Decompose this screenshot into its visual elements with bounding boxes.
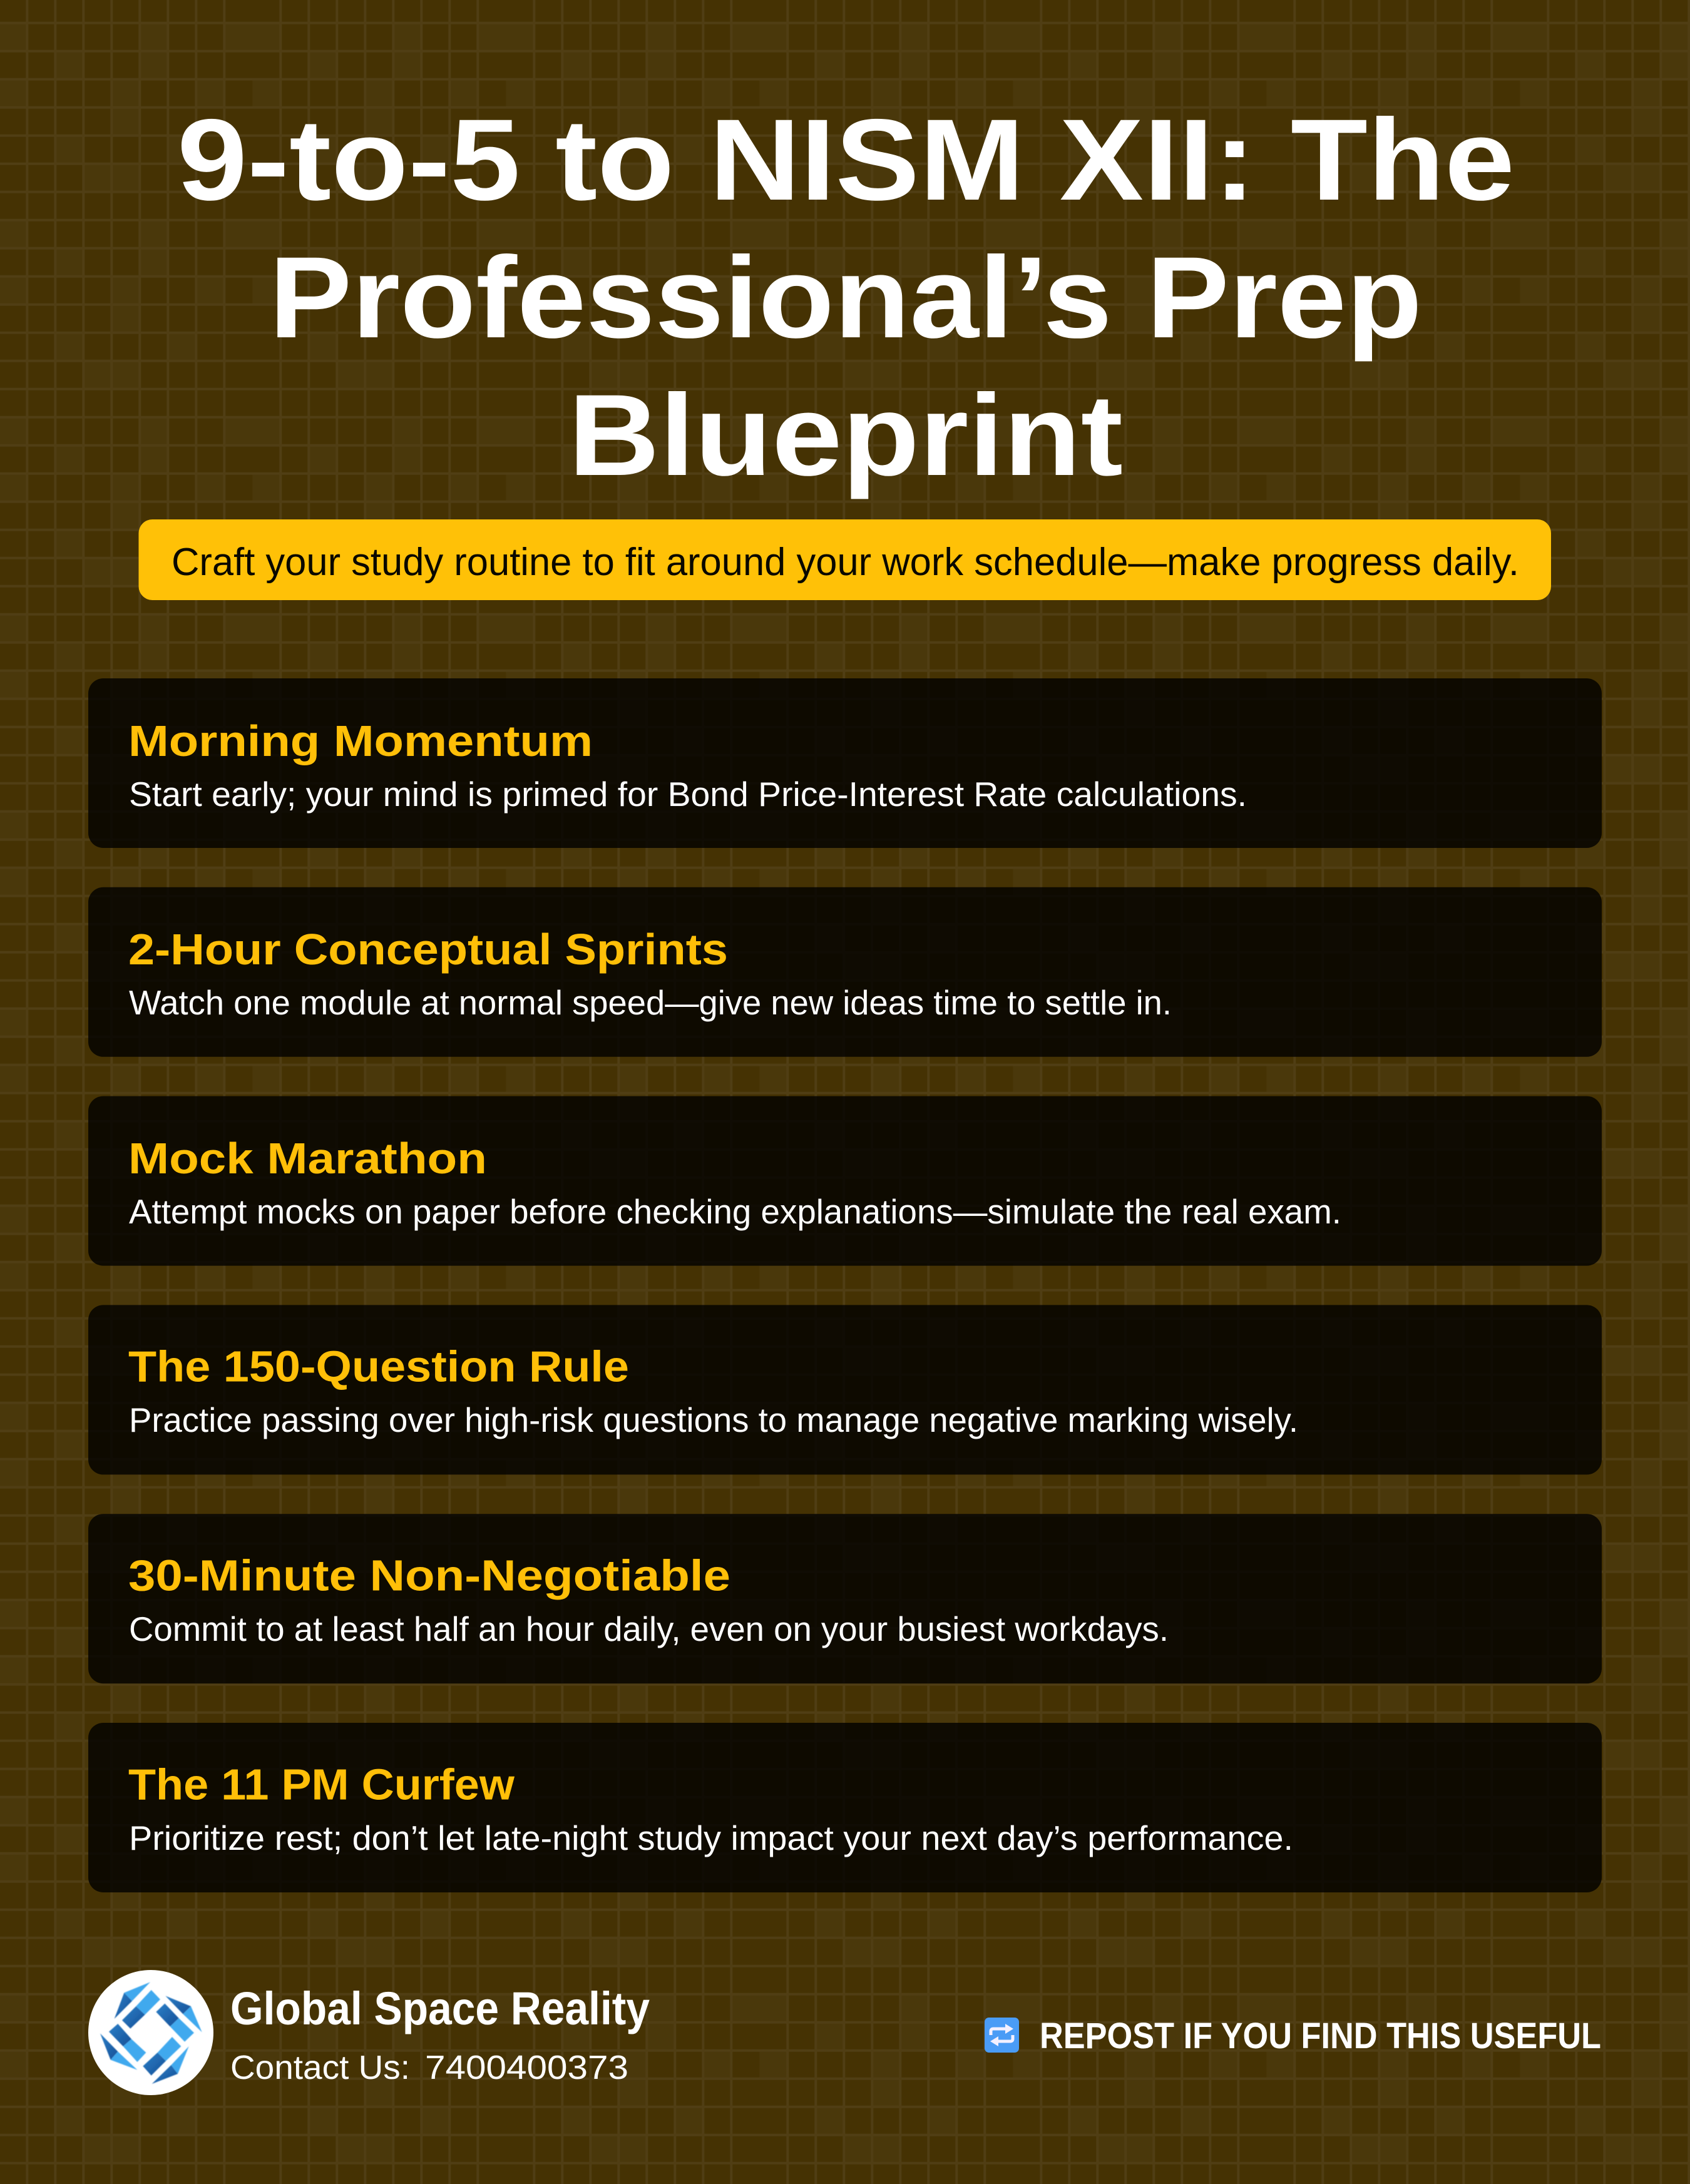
card: 30-Minute Non-Negotiable: 30-Minute Non-Negotiable (128, 1551, 730, 1600)
card: 30-Minute Non-Negotiable: Commit to at least half an hour daily, even on your busiest workdays. (129, 1610, 1169, 1648)
subtitle banner (139, 519, 1551, 600)
card: 2-Hour Conceptual Sprints: 2-Hour Conceptual Sprints (128, 925, 728, 974)
card: 2-Hour Conceptual Sprints (88, 887, 1602, 1057)
card: The 11 PM Curfew: The 11 PM Curfew (128, 1760, 515, 1809)
card: The 11 PM Curfew: Prioritize rest; don’t let late-night study impact your next day’s performance. (129, 1819, 1293, 1857)
title: Blueprint (568, 371, 1123, 500)
icon: repost (985, 2018, 1019, 2053)
subtitle banner: Craft your study routine to fit around your work schedule—make progress daily. (172, 541, 1519, 584)
card: Morning Momentum: Morning Momentum (128, 717, 593, 765)
contact line: Contact Us: (230, 2049, 410, 2086)
card: 30-Minute Non-Negotiable (88, 1514, 1602, 1683)
contact line (230, 2049, 628, 2086)
title (177, 96, 1515, 500)
title: Professional’s Prep (269, 233, 1422, 362)
card: The 150-Question Rule: The 150-Question Rule (128, 1342, 629, 1391)
card: The 150-Question Rule (88, 1305, 1602, 1474)
card: The 150-Question Rule: Practice passing over high-risk questions to manage negative marking wisely. (129, 1401, 1298, 1439)
card: Mock Marathon: Attempt mocks on paper before checking explanations—simulate the real exam. (129, 1192, 1341, 1231)
card: 2-Hour Conceptual Sprints: Watch one module at normal speed—give new ideas time to settle in. (129, 983, 1172, 1022)
contact line: 7400400373 (425, 2049, 628, 2086)
title: 9-to-5 to NISM XII: The (177, 96, 1515, 225)
logo: Global Space Reality (88, 1970, 213, 2095)
card: The 11 PM Curfew (88, 1723, 1602, 1892)
card: Morning Momentum (88, 678, 1602, 848)
card: Mock Marathon: Mock Marathon (128, 1134, 487, 1183)
card: Mock Marathon (88, 1096, 1602, 1266)
card: Morning Momentum: Start early; your mind is primed for Bond Price-Interest Rate calculations. (129, 775, 1247, 814)
brand name: Global Space Reality (230, 1982, 650, 2034)
repost call to action: REPOST IF YOU FIND THIS USEFUL (1040, 2016, 1601, 2056)
